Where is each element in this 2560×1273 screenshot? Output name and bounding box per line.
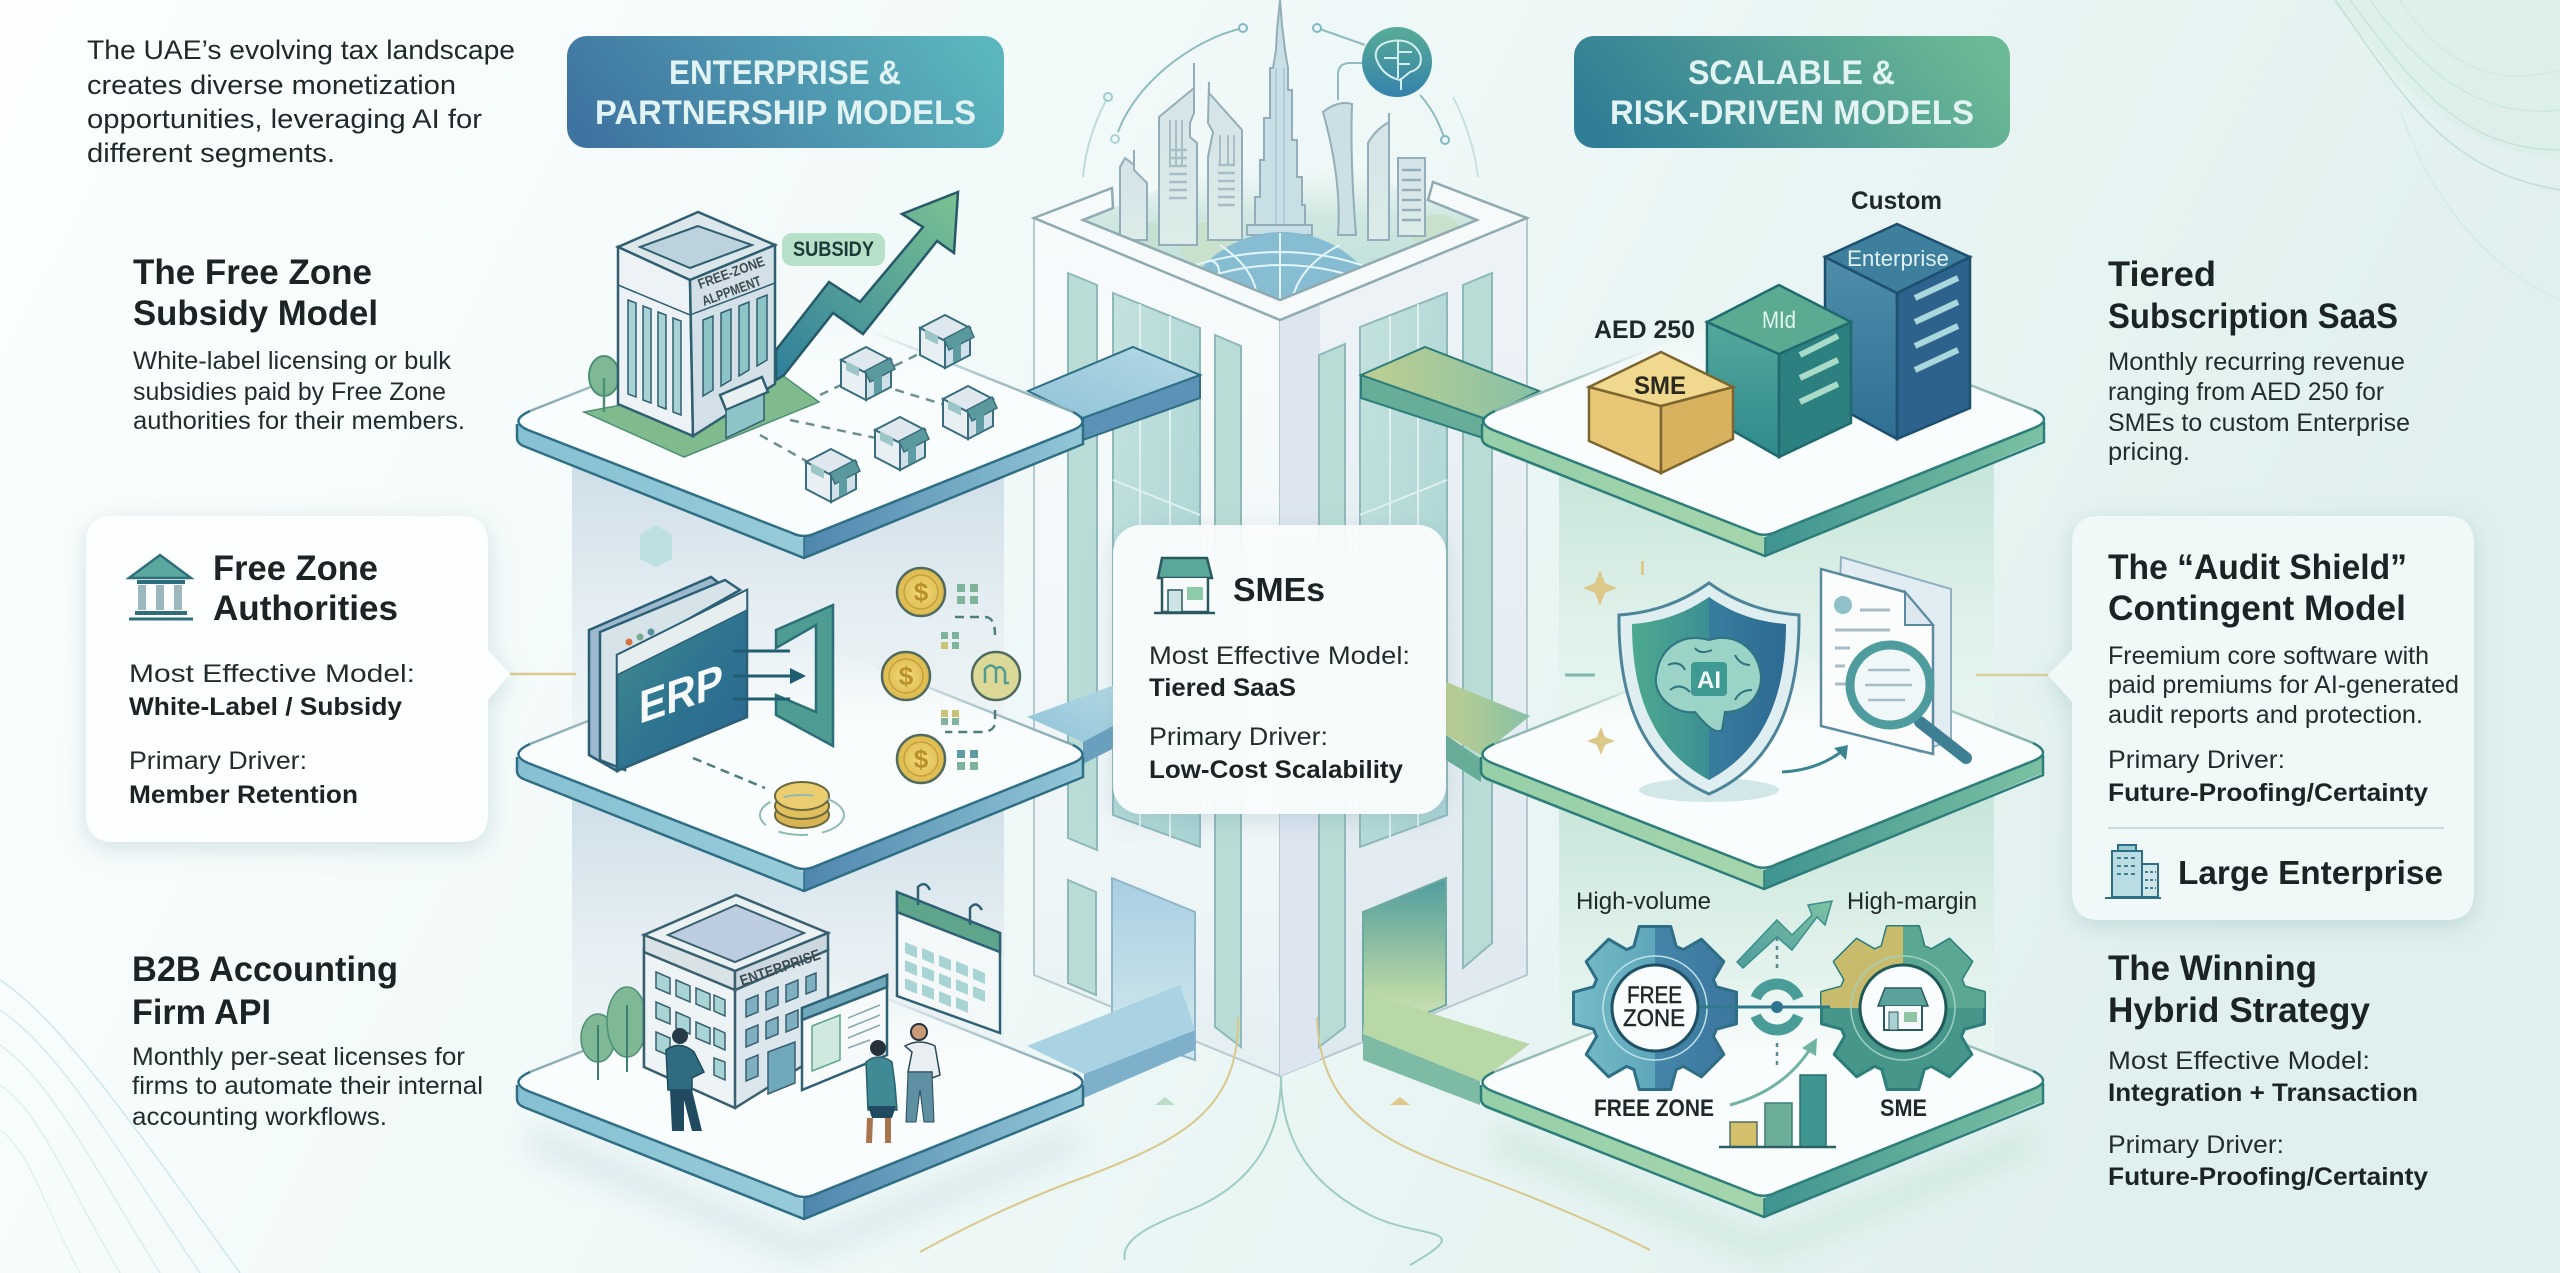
coins xyxy=(882,568,1020,783)
card details: Most Effective Model: xyxy=(1149,642,1410,670)
panel: SMEs: Primary Driver: xyxy=(1149,723,1328,751)
skyline on the tower roof xyxy=(1030,0,1530,322)
text block: tiered subscription SaaS: Monthly recurring revenue xyxy=(2108,348,2405,376)
zigzag arrow xyxy=(1737,901,1832,968)
price labels: AED 250 xyxy=(1594,316,1695,344)
platform: hybrid strategy xyxy=(1481,968,2043,1217)
text block: winning hybrid strategy xyxy=(2108,949,2428,1191)
icon: government building xyxy=(129,555,193,619)
header: scalable and risk-driven models xyxy=(1574,36,2010,148)
growth arrow xyxy=(776,192,958,380)
panel: audit shield and large enterprise: audit reports and protection. xyxy=(2108,701,2423,729)
card description: Freemium core software with xyxy=(2108,642,2429,670)
icon: office buildings xyxy=(2105,845,2161,898)
shops xyxy=(841,347,895,400)
text block: winning hybrid strategy: Integration + Transaction xyxy=(2108,1079,2418,1107)
document xyxy=(1835,557,1951,752)
text block: tiered subscription SaaS: Tiered xyxy=(2108,255,2216,294)
text block: free zone subsidy model: Subsidy Model xyxy=(133,294,378,333)
icon: AI brain node xyxy=(1362,27,1432,97)
coin stack xyxy=(775,782,829,828)
text block: B2B accounting firm API xyxy=(132,950,483,1131)
left support column xyxy=(572,440,1004,1090)
trees xyxy=(581,987,647,1080)
web screen xyxy=(802,975,887,1090)
lower network lines xyxy=(920,1017,1650,1265)
bar chart xyxy=(1719,1075,1836,1147)
illustration: tiered subscription cubes: MId xyxy=(1762,307,1796,334)
lawn xyxy=(584,375,819,457)
text block: B2B accounting firm API: Monthly per-seat licenses for xyxy=(132,1043,465,1071)
left gear xyxy=(1574,926,1736,1090)
illustration: tiered subscription cubes: SME xyxy=(1634,372,1686,400)
platform: audit shield xyxy=(1481,640,2043,889)
text block: tiered subscription SaaS: Subscription SaaS xyxy=(2108,297,2398,336)
gear labels: FREE ZONE xyxy=(1594,1095,1714,1122)
mid tier xyxy=(1707,285,1851,457)
header: enterprise and partnership models xyxy=(567,36,1004,148)
illustration: free zone building, subsidy arrow and shops xyxy=(584,192,997,502)
text block: free zone subsidy model xyxy=(133,253,465,435)
roof well xyxy=(1083,140,1477,300)
intro text xyxy=(87,35,515,168)
building xyxy=(644,895,828,1108)
platform: ERP integration xyxy=(517,639,1083,891)
faint tower icon xyxy=(640,525,672,585)
panel: audit shield and large enterprise xyxy=(2048,516,2474,920)
person two xyxy=(866,1040,897,1143)
trend labels: High-volume xyxy=(1576,888,1711,915)
connector xyxy=(1700,937,1830,1070)
tree xyxy=(589,356,619,412)
ground shadow left xyxy=(530,1125,1075,1260)
globe dome xyxy=(1195,232,1364,298)
bridge: top right xyxy=(1361,347,1539,438)
card heading: SMEs xyxy=(1233,571,1325,608)
text block: B2B accounting firm API: accounting workflows. xyxy=(132,1103,387,1131)
header: scalable and risk-driven models: RISK-DRIVEN MODELS xyxy=(1610,94,1974,132)
calendar xyxy=(897,884,1000,1033)
coins: $ xyxy=(899,661,914,691)
gear labels: SME xyxy=(1880,1095,1927,1122)
gear labels xyxy=(1594,1095,1927,1122)
dotted connectors xyxy=(693,617,995,788)
magnifier xyxy=(1920,722,1966,758)
text block: B2B accounting firm API: Firm API xyxy=(132,993,271,1032)
bridge: top left xyxy=(1028,347,1200,440)
ERP window xyxy=(589,577,747,771)
person three xyxy=(905,1024,940,1122)
building xyxy=(618,212,775,438)
text block: free zone subsidy model: White-label licensing or bulk xyxy=(133,347,451,375)
text block: B2B accounting firm API: B2B Accounting xyxy=(132,950,398,989)
segment name: Large Enterprise xyxy=(2178,854,2443,891)
text block: tiered subscription SaaS: SMEs to custom Enterprise xyxy=(2108,409,2410,437)
connector line left card xyxy=(510,673,576,675)
card heading: The “Audit Shield” xyxy=(2108,548,2407,587)
central tower xyxy=(1034,218,1527,1076)
coins: $ xyxy=(914,744,929,774)
shield xyxy=(1619,583,1799,794)
intro text: The UAE’s evolving tax landscape xyxy=(87,35,515,65)
card details: Most Effective Model: xyxy=(129,660,415,688)
gear text: ZONE xyxy=(1623,1005,1685,1032)
bridge: bottom left xyxy=(1027,985,1195,1098)
text block: tiered subscription SaaS xyxy=(2108,255,2410,466)
text block: free zone subsidy model: authorities for their members. xyxy=(133,407,465,435)
text block: winning hybrid strategy: Hybrid Strategy xyxy=(2108,991,2371,1030)
icon: store xyxy=(1154,558,1215,613)
coins: $ xyxy=(914,577,929,607)
brain xyxy=(1656,638,1761,731)
header: enterprise and partnership models: ENTERPRISE & xyxy=(669,54,901,92)
panel: audit shield and large enterprise: Future-Proofing/Certainty xyxy=(2108,779,2428,807)
illustration: tiered subscription cubes: Enterprise xyxy=(1847,246,1949,271)
curved arrow xyxy=(1782,748,1846,772)
gear text xyxy=(1623,982,1685,1032)
ground shadow right xyxy=(1495,1125,2035,1260)
text block: winning hybrid strategy: Future-Proofing/Certainty xyxy=(2108,1163,2428,1191)
text block: free zone subsidy model: The Free Zone xyxy=(133,253,372,292)
panel: free zone authorities: Member Retention xyxy=(129,781,358,809)
illustration: hybrid strategy gears: High-margin xyxy=(1847,888,1977,915)
intro text: creates diverse monetization xyxy=(87,70,456,100)
intro text: different segments. xyxy=(87,138,335,168)
card heading: Free Zone xyxy=(213,549,378,588)
API bracket and arrows xyxy=(776,605,833,746)
text block: tiered subscription SaaS: pricing. xyxy=(2108,438,2190,466)
panel: audit shield and large enterprise: Primary Driver: xyxy=(2108,746,2285,774)
header: scalable and risk-driven models: SCALABLE & xyxy=(1688,54,1895,92)
illustration: tiered subscription cubes xyxy=(1589,187,1970,473)
right support column xyxy=(1559,440,1994,1090)
illustration: enterprise building, calendar and people xyxy=(581,884,1000,1143)
header: enterprise and partnership models: PARTNERSHIP MODELS xyxy=(595,94,976,132)
text block: B2B accounting firm API: firms to automate their internal xyxy=(132,1072,483,1100)
text block: winning hybrid strategy: Most Effective Model: xyxy=(2108,1047,2370,1075)
right gear xyxy=(1822,926,1984,1090)
intro text: opportunities, leveraging AI for xyxy=(87,104,482,134)
panel: free zone authorities: Authorities xyxy=(213,589,398,628)
bridge: bottom right xyxy=(1363,993,1530,1105)
platform: accounting firm xyxy=(517,967,1083,1219)
illustration: audit shield, document and magnifier xyxy=(1565,557,1966,802)
text block: tiered subscription SaaS: ranging from AED 250 for xyxy=(2108,378,2384,406)
dashed links xyxy=(760,341,968,475)
text block: winning hybrid strategy: The Winning xyxy=(2108,949,2317,988)
panel: free zone authorities: Primary Driver: xyxy=(129,747,307,775)
panel: SMEs: Tiered SaaS xyxy=(1149,674,1296,702)
panel: free zone authorities xyxy=(86,516,510,842)
network arcs xyxy=(1083,28,1478,177)
text block: free zone subsidy model: subsidies paid by Free Zone xyxy=(133,378,446,406)
SME tier xyxy=(1589,352,1733,473)
connector line right card xyxy=(1976,674,2048,676)
illustration: ERP window, API bracket and coins xyxy=(589,525,1020,835)
illustration: hybrid strategy gears xyxy=(1574,888,1984,1147)
panel: SMEs xyxy=(1113,525,1446,814)
illustration: tiered subscription cubes: Custom xyxy=(1851,187,1942,215)
text block: winning hybrid strategy: Primary Driver: xyxy=(2108,1131,2284,1159)
panel: audit shield and large enterprise: Contingent Model xyxy=(2108,589,2406,628)
roof frame xyxy=(1034,182,1527,320)
illustration: audit shield, document and magnifier: AI xyxy=(1697,667,1721,694)
panel: SMEs: Low-Cost Scalability xyxy=(1149,756,1403,784)
panel: audit shield and large enterprise: paid premiums for AI-generated xyxy=(2108,671,2459,699)
platform: free zone subsidy xyxy=(517,306,1083,558)
subsidy pill xyxy=(782,233,885,266)
person one xyxy=(666,1028,704,1131)
bridge: middle left xyxy=(1027,683,1120,764)
bridge: middle right xyxy=(1446,682,1530,782)
building sign: FREE-ZONE xyxy=(696,253,767,292)
platform: tiered subscription xyxy=(1482,306,2044,556)
building sign xyxy=(696,253,767,309)
curved arrow xyxy=(1730,1046,1812,1105)
panel: free zone authorities: White-Label / Subsidy xyxy=(129,693,402,721)
sparkles xyxy=(1583,561,1644,755)
subsidy pill: SUBSIDY xyxy=(793,238,874,261)
enterprise tier xyxy=(1825,224,1970,439)
gear text: FREE xyxy=(1627,982,1682,1009)
building sign: ENTERPRISE xyxy=(738,946,823,990)
ERP label: ERP xyxy=(639,654,723,735)
building sign: ALPPMENT xyxy=(700,272,764,309)
